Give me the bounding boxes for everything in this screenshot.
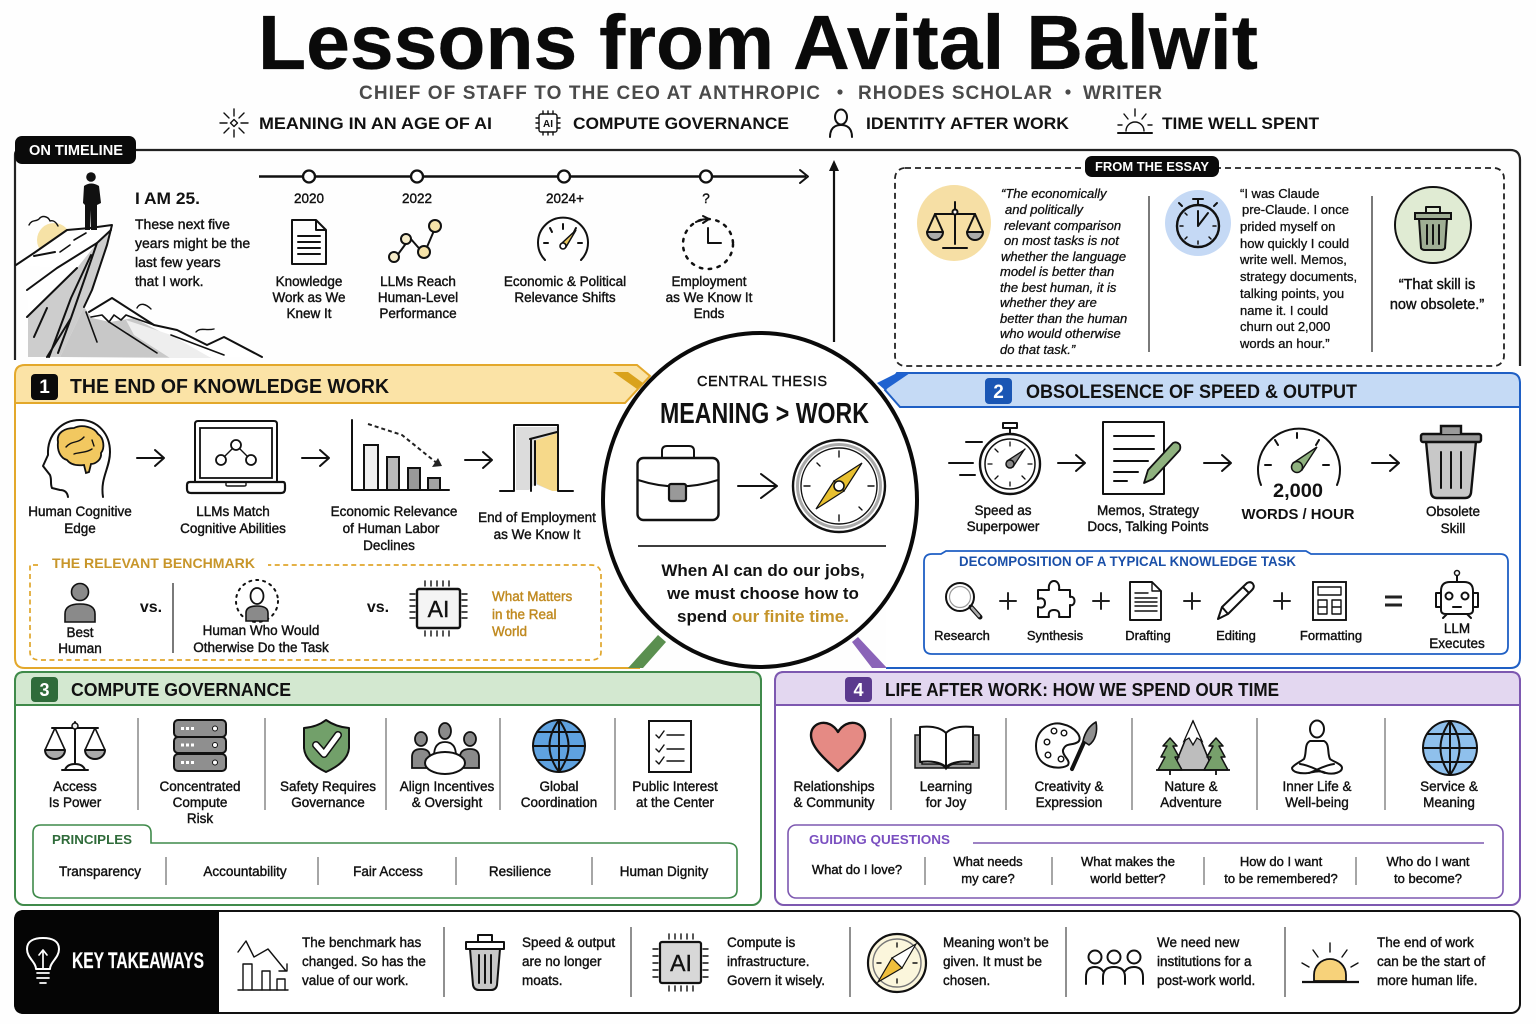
item: nature and adventure: Adventure [1160,795,1222,810]
theme: meaning in an age of AI: MEANING IN AN AGE OF AI [259,114,492,133]
takeaway: start of more human life [1302,935,1485,988]
illustration: person on cliff [16,172,262,358]
text: what matters in the real world: What Matters [492,589,573,604]
takeaway: speed and output [466,935,615,990]
icon: human who would otherwise: Otherwise Do the Task [193,640,329,655]
takeaway: meaning must be chosen [868,934,1049,992]
text: what matters in the real world: World [492,624,527,639]
item: global coordination [521,720,597,810]
timeline item: question mark: ? [702,191,710,206]
box: principles: Accountability [203,864,287,879]
item: global coordination: Coordination [521,795,597,810]
timeline item: question mark [666,191,753,321]
item: align incentives and oversight: & Oversight [412,795,483,810]
item: creativity and expression [1034,722,1104,810]
timeline item: 2022: 2022 [402,191,432,206]
takeaway: compute is infrastructure [653,934,825,991]
icon: gauge with words per hour [1242,429,1355,523]
icon: memo with pen [1103,422,1180,494]
quote: economically and politically [1000,186,1127,357]
quote: economically and politically: whether the language [1001,249,1126,264]
arrow: work to meaning [738,474,777,498]
takeaway: new institutions: We need new [1157,935,1240,950]
icon: human who would otherwise [193,580,329,655]
item: inner life and well-being: Inner Life & [1282,779,1352,794]
panel: key takeaways [14,910,1520,1014]
quote: I was Claude: “I was Claude [1240,186,1319,201]
timeline item: 2022: Human-Level [378,290,458,305]
header band [15,365,650,403]
item: creativity and expression: Expression [1036,795,1102,810]
icon: head with brain [43,420,110,497]
quote: that skill is obsolete [1390,277,1484,313]
step labels: as We Know It [494,527,581,542]
icon: AI chip [410,581,467,636]
item: safety requires governance [280,720,376,810]
takeaway: new institutions [1086,935,1255,988]
icon: trash can [1421,426,1481,498]
box: guiding questions: to become? [1394,871,1462,886]
label: central thesis: CENTRAL THESIS [697,374,827,390]
tab: on timeline [15,136,136,164]
theme: compute governance: COMPUTE GOVERNANCE [573,114,789,133]
intro text [135,189,250,289]
quote: economically and politically: do that task.” [1000,342,1076,357]
quote: I was Claude: strategy documents, [1240,269,1357,284]
quote: economically and politically: whether they are [1000,295,1097,310]
quote: I was Claude: pre-Claude. I once [1242,202,1349,217]
thesis statement: we must choose how to [666,584,859,603]
takeaway: benchmark changed: The benchmark has [302,935,422,950]
item: concentrated compute risk: Concentrated [159,779,241,794]
arrow: central thesis to timeline [829,160,839,342]
takeaway: benchmark changed [238,935,426,990]
box: decomposition of a typical knowledge task: DECOMPOSITION OF A TYPICAL KNOWLEDGE TASK [959,554,1296,569]
theme row [220,109,1320,137]
item: service and meaning: Service & [1420,779,1478,794]
text: what matters in the real world: in the Real [492,607,557,622]
quote: I was Claude: how quickly I could [1240,236,1349,251]
tab: from the essay: FROM THE ESSAY [1095,159,1209,174]
icon: drafting [1125,582,1171,643]
timeline item: question mark: Employment [671,274,747,289]
box: the relevant benchmark [30,556,601,660]
intro text: I AM 25. [135,189,200,208]
quote: I was Claude: name it. I could [1240,303,1328,318]
timeline item: question mark: as We Know It [666,290,753,305]
quote: economically and politically: model is better than [1000,264,1114,279]
timeline item: 2022: LLMs Reach [380,274,456,289]
timeline item: 2020 [272,191,346,321]
timeline item: 2022 [378,191,458,321]
header band: COMPUTE GOVERNANCE [71,680,291,700]
box: guiding questions: to be remembered? [1224,871,1338,886]
timeline item: 2024+: Relevance Shifts [514,290,616,305]
theme: identity after work: IDENTITY AFTER WORK [866,114,1070,133]
icon: robot LLM: LLM [1444,621,1470,636]
panel: on timeline [15,136,1520,366]
item: creativity and expression: Creativity & [1034,779,1104,794]
step labels: Edge [64,521,96,536]
item: align incentives and oversight [400,723,495,810]
icon: best human: Best [66,625,94,640]
central thesis circle [603,333,917,667]
panel 2: obsolescence of speed and output [877,373,1520,668]
quote: economically and politically: on most tasks is not [1004,233,1120,248]
connector: green wedge to panel 3 [628,635,666,668]
panel 1: the end of knowledge work [15,365,650,668]
arrow [465,452,492,468]
quote: I was Claude: churn out 2,000 [1240,319,1330,334]
quote: economically and politically: better than the human [1000,311,1127,326]
item: concentrated compute risk [159,720,241,826]
step labels: Docs, Talking Points [1087,519,1209,534]
item: access is power: Access [53,779,97,794]
box: principles: PRINCIPLES [52,832,132,847]
quote: that skill is obsolete: now obsolete.” [1390,297,1484,313]
icon: synthesis: Synthesis [1027,628,1084,643]
quote: economically and politically: who would otherwise [1000,326,1121,341]
thesis statement: spend our finite time. [677,607,849,626]
icon: research: Research [934,628,990,643]
icon: robot LLM: Executes [1429,636,1485,651]
theme: compute governance [536,111,789,135]
icon: human who would otherwise: Human Who Would [203,623,319,638]
icon: declining bar chart [352,420,449,490]
header band [15,672,761,705]
step labels: Superpower [967,519,1040,534]
takeaway: speed and output: Speed & output [522,935,615,950]
item: service and meaning: Meaning [1423,795,1475,810]
box: principles [33,825,737,898]
item: learning for joy: Learning [920,779,972,794]
item: relationships and community [793,723,875,810]
takeaway: compute is infrastructure: AI [670,950,692,976]
takeaway: meaning must be chosen: Meaning won’t be [943,935,1049,950]
takeaway: start of more human life: can be the start of [1377,954,1485,969]
item: concentrated compute risk: Risk [187,811,213,826]
theme: meaning in an age of AI [220,109,492,137]
item: relationships and community: Relationships [793,779,875,794]
timeline item: 2020: Knowledge [276,274,342,289]
timeline item: 2020: Knew It [286,306,332,321]
arrow [137,450,164,466]
arrow [302,450,329,466]
panel 4: life after work [775,672,1520,905]
header band: 1 [39,377,50,398]
takeaway: meaning must be chosen: given. It must be [943,954,1042,969]
takeaway: compute is infrastructure: infrastructure. [727,954,810,969]
takeaway: speed and output: are no longer [522,954,602,969]
header band: 3 [39,680,50,700]
item: nature and adventure [1156,721,1230,810]
box: the relevant benchmark: vs. [140,599,162,616]
heading: key takeaways [27,938,204,983]
box: guiding questions: How do I want [1240,854,1323,869]
panel 3: compute governance [15,672,761,905]
step labels: End of Employment [478,510,596,525]
item: nature and adventure: Nature & [1164,779,1218,794]
header band [877,373,1520,407]
icon: best human [58,584,102,656]
header band: 4 [853,680,864,700]
box: principles: Fair Access [353,864,423,879]
icon: open door [500,425,573,491]
quote: I was Claude: talking points, you [1240,286,1344,301]
icon: laptop network [187,421,285,493]
theme: compute governance: AI [543,119,553,130]
item: inner life and well-being: Well-being [1285,795,1349,810]
arrow [1058,455,1085,471]
text: what matters in the real world [492,589,573,639]
item: access is power: Is Power [49,795,102,810]
takeaway: compute is infrastructure: Govern it wisely. [727,973,825,988]
header band: OBSOLESENCE OF SPEED & OUTPUT [1026,382,1357,403]
step labels: Human Cognitive [28,504,132,519]
item: service and meaning [1420,721,1478,810]
item: public interest at the center: Public Interest [632,779,718,794]
takeaway: new institutions: post-work world. [1157,973,1255,988]
step labels: Cognitive Abilities [180,521,286,536]
box: principles: Resilience [489,864,551,879]
heading: key takeaways: KEY TAKEAWAYS [72,948,204,973]
step labels: Skill [1441,521,1465,536]
quote: that skill is obsolete: “That skill is [1399,277,1475,293]
subtitle: CHIEF OF STAFF TO THE CEO AT ANTHROPIC [359,83,820,104]
step labels: LLMs Match [196,504,270,519]
icon: compass [793,440,885,532]
icon: formatting: Formatting [1300,628,1362,643]
item: learning for joy: for Joy [926,795,967,810]
icon: scales in circle [917,185,991,261]
box: the relevant benchmark: THE RELEVANT BENCHMARK [52,556,255,571]
item: global coordination: Global [539,779,579,794]
takeaway: start of more human life: The end of work [1377,935,1474,950]
item: public interest at the center [632,721,718,810]
header band: 2 [993,382,1004,403]
step labels: Declines [363,538,415,553]
intro text: that I work. [135,273,203,289]
icon: research [934,583,990,643]
icon: formatting [1300,582,1362,643]
item: relationships and community: & Community [793,795,875,810]
icon: drafting: Drafting [1125,628,1171,643]
icon: synthesis [1027,581,1084,643]
arrow [1372,455,1399,471]
theme: time well spent: TIME WELL SPENT [1162,114,1320,133]
takeaway: benchmark changed: value of our work. [302,973,409,988]
theme: time well spent [1118,109,1320,133]
subtitle [359,83,1162,104]
heading: meaning over work: MEANING > WORK [660,398,869,430]
icon: editing: Editing [1216,628,1256,643]
box: the relevant benchmark: vs. [367,599,389,616]
box: guiding questions: world better? [1089,871,1166,886]
takeaway: start of more human life: more human life. [1377,973,1478,988]
step labels [28,504,596,553]
timeline item: question mark: Ends [694,306,725,321]
thesis statement: When AI can do our jobs, [661,561,865,580]
timeline item: 2024+: Economic & Political [504,274,626,289]
item: learning for joy [915,727,979,810]
timeline item: 2022: Performance [379,306,457,321]
arrow [1204,455,1231,471]
item: inner life and well-being [1282,720,1352,810]
box: principles: Transparency [59,864,141,879]
step labels: Speed as [974,503,1032,518]
item: safety requires governance: Safety Requires [280,779,376,794]
step labels: of Human Labor [343,521,440,536]
takeaway: speed and output: moats. [522,973,563,988]
box: decomposition of a typical knowledge task [924,551,1508,654]
takeaway: meaning must be chosen: chosen. [943,973,990,988]
tab: from the essay [1085,156,1219,177]
quote: I was Claude: prided myself on [1240,219,1335,234]
theme: identity after work [830,110,1070,137]
subtitle: RHODES SCHOLAR [858,83,1052,104]
icon: stopwatch in circle [1165,190,1231,256]
title: Lessons from Avital Balwit [258,0,1258,86]
box: guiding questions: What makes the [1081,854,1175,869]
takeaway: compute is infrastructure: Compute is [727,935,796,950]
icon: gauge with words per hour: 2,000 [1273,481,1323,502]
timeline item: 2020: Work as We [272,290,346,305]
box: guiding questions: Who do I want [1386,854,1470,869]
quote: economically and politically: “The economically [1001,186,1108,201]
timeline item: 2020: 2020 [294,191,324,206]
icon: robot LLM [1429,570,1485,651]
icon: stopwatch with speed lines [949,423,1040,494]
header band: LIFE AFTER WORK: HOW WE SPEND OUR TIME [885,680,1279,700]
thesis statement [661,561,865,626]
header band: THE END OF KNOWLEDGE WORK [70,376,390,398]
connector: purple wedge to panel 4 [852,637,887,668]
quote: economically and politically: the best human, it is [1000,280,1117,295]
box: guiding questions: What do I love? [812,862,902,877]
icon: trash in circle [1395,187,1471,263]
intro text: last few years [135,254,221,270]
step labels: Economic Relevance [331,504,457,519]
item: align incentives and oversight: Align Incentives [400,779,495,794]
step labels: Memos, Strategy [1097,503,1199,518]
item: public interest at the center: at the Center [636,795,715,810]
box: guiding questions: GUIDING QUESTIONS [809,832,950,847]
quote: economically and politically: and politically [1005,202,1085,217]
icon: best human: Human [58,641,102,656]
icon: AI chip: AI [428,596,449,622]
subtitle: WRITER [1083,83,1162,104]
icon: briefcase [638,446,718,520]
step labels [967,503,1480,536]
quote: I was Claude: write well. Memos, [1239,252,1347,267]
box: guiding questions [788,825,1503,898]
timeline item: 2024+: 2024+ [546,191,584,206]
tab: on timeline: ON TIMELINE [29,143,123,159]
takeaway: benchmark changed: changed. So has the [302,954,426,969]
quote: economically and politically: relevant comparison [1004,218,1121,233]
timeline axis [259,170,808,183]
header band [775,672,1520,705]
step labels: Obsolete [1426,504,1480,519]
panel: from the essay [895,156,1504,366]
intro text: years might be the [135,235,250,251]
item: concentrated compute risk: Compute [173,795,227,810]
takeaway: new institutions: institutions for a [1157,954,1252,969]
quote: I was Claude [1239,186,1357,351]
item: safety requires governance: Governance [291,795,365,810]
quote: I was Claude: words an hour.” [1239,336,1330,351]
box: guiding questions: my care? [961,871,1015,886]
timeline item: 2024+ [504,191,626,305]
box: guiding questions: What needs [953,854,1023,869]
intro text: These next five [135,216,230,232]
item: access is power [45,722,105,810]
icon: gauge with words per hour: WORDS / HOUR [1242,506,1355,523]
box: principles: Human Dignity [620,864,709,879]
icon: editing [1216,582,1256,643]
